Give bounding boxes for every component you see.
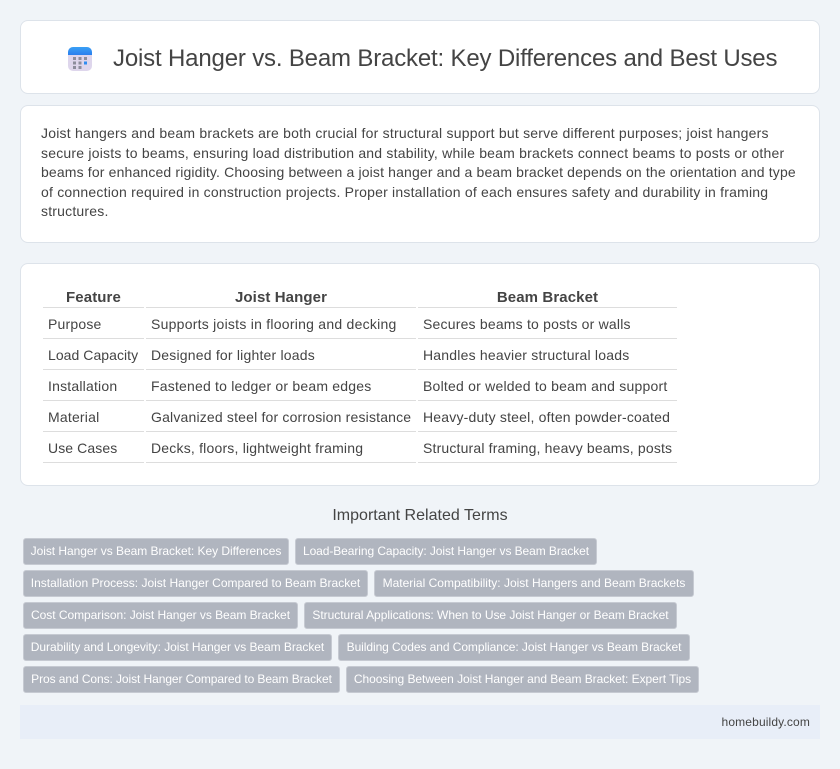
tag list: related terms (23, 538, 699, 693)
table: feature comparison: Supports joists in flooring and decking (151, 316, 397, 332)
tag (374, 570, 694, 597)
tag: Load-Bearing Capacity: Joist Hanger vs Beam Bracket (303, 544, 589, 558)
table: feature comparison: Designed for lighter loads (151, 347, 315, 363)
text block: introduction: Joist hangers and beam brackets are both crucial for structural support but serve different purposes; joist hangers (41, 125, 769, 141)
heading: related terms: Important Related Terms (332, 507, 508, 524)
row: Installation: Installation (48, 378, 117, 394)
table: feature comparison: Handles heavier structural loads (423, 347, 629, 363)
header: Feature: Feature (66, 289, 121, 306)
panel: title header (20, 20, 820, 94)
tag (23, 570, 368, 597)
table: feature comparison: Fastened to ledger or beam edges (151, 378, 371, 394)
row: Load Capacity: Load Capacity (48, 347, 138, 363)
text block: introduction: secure joists to beams, ensuring load distribution and stability, while beam brackets connect beams to posts or other (41, 145, 784, 161)
tag (23, 666, 340, 693)
table: feature comparison: Bolted or welded to beam and support (423, 378, 668, 394)
table: feature comparison: Decks, floors, lightweight framing (151, 440, 363, 456)
tag: Durability and Longevity: Joist Hanger vs Beam Bracket (31, 640, 324, 654)
title: Joist Hanger vs. Beam Bracket: Key Differences and Best Uses (113, 45, 777, 72)
text block: introduction (41, 125, 796, 219)
tag (304, 602, 677, 629)
icon: calendar (68, 47, 92, 71)
table: feature comparison: Structural framing, heavy beams, posts (423, 440, 672, 456)
table: feature comparison: Galvanized steel for corrosion resistance (151, 409, 411, 425)
footer text: homebuildy.com (722, 715, 810, 729)
tag: Material Compatibility: Joist Hangers and Beam Brackets (383, 576, 685, 590)
footer bar (20, 705, 820, 739)
panel: introduction (20, 105, 820, 243)
tag (338, 634, 690, 661)
table: feature comparison: Secures beams to posts or walls (423, 316, 631, 332)
row: Material: Material (48, 409, 99, 425)
tag (346, 666, 699, 693)
tag: Pros and Cons: Joist Hanger Compared to Beam Bracket (31, 672, 332, 686)
tag: Building Codes and Compliance: Joist Hanger vs Beam Bracket (347, 640, 681, 654)
tag: Structural Applications: When to Use Joist Hanger or Beam Bracket (312, 608, 669, 622)
tag (295, 538, 597, 565)
row: Purpose: Purpose (48, 316, 102, 332)
header: Beam Bracket: Beam Bracket (497, 289, 598, 306)
tag: Cost Comparison: Joist Hanger vs Beam Bracket (31, 608, 290, 622)
panel: comparison table (20, 263, 820, 486)
tag: Joist Hanger vs Beam Bracket: Key Differences (31, 544, 281, 558)
tag (23, 634, 332, 661)
table: feature comparison (43, 289, 677, 463)
text block: introduction: structures. (41, 203, 109, 219)
table: feature comparison: Heavy-duty steel, often powder-coated (423, 409, 670, 425)
row: Use Cases: Use Cases (48, 440, 117, 456)
text block: introduction: beams for enhanced rigidity. Choosing between a joist hanger and a beam bracket depends on the orientation and type (41, 164, 796, 180)
tag (23, 602, 298, 629)
header: Joist Hanger: Joist Hanger (235, 289, 327, 306)
tag (23, 538, 289, 565)
text block: introduction: of connection required in construction projects. Proper installation of each ensures safety and durability in framing (41, 184, 768, 200)
tag: Installation Process: Joist Hanger Compared to Beam Bracket (31, 576, 360, 590)
tag: Choosing Between Joist Hanger and Beam Bracket: Expert Tips (354, 672, 691, 686)
